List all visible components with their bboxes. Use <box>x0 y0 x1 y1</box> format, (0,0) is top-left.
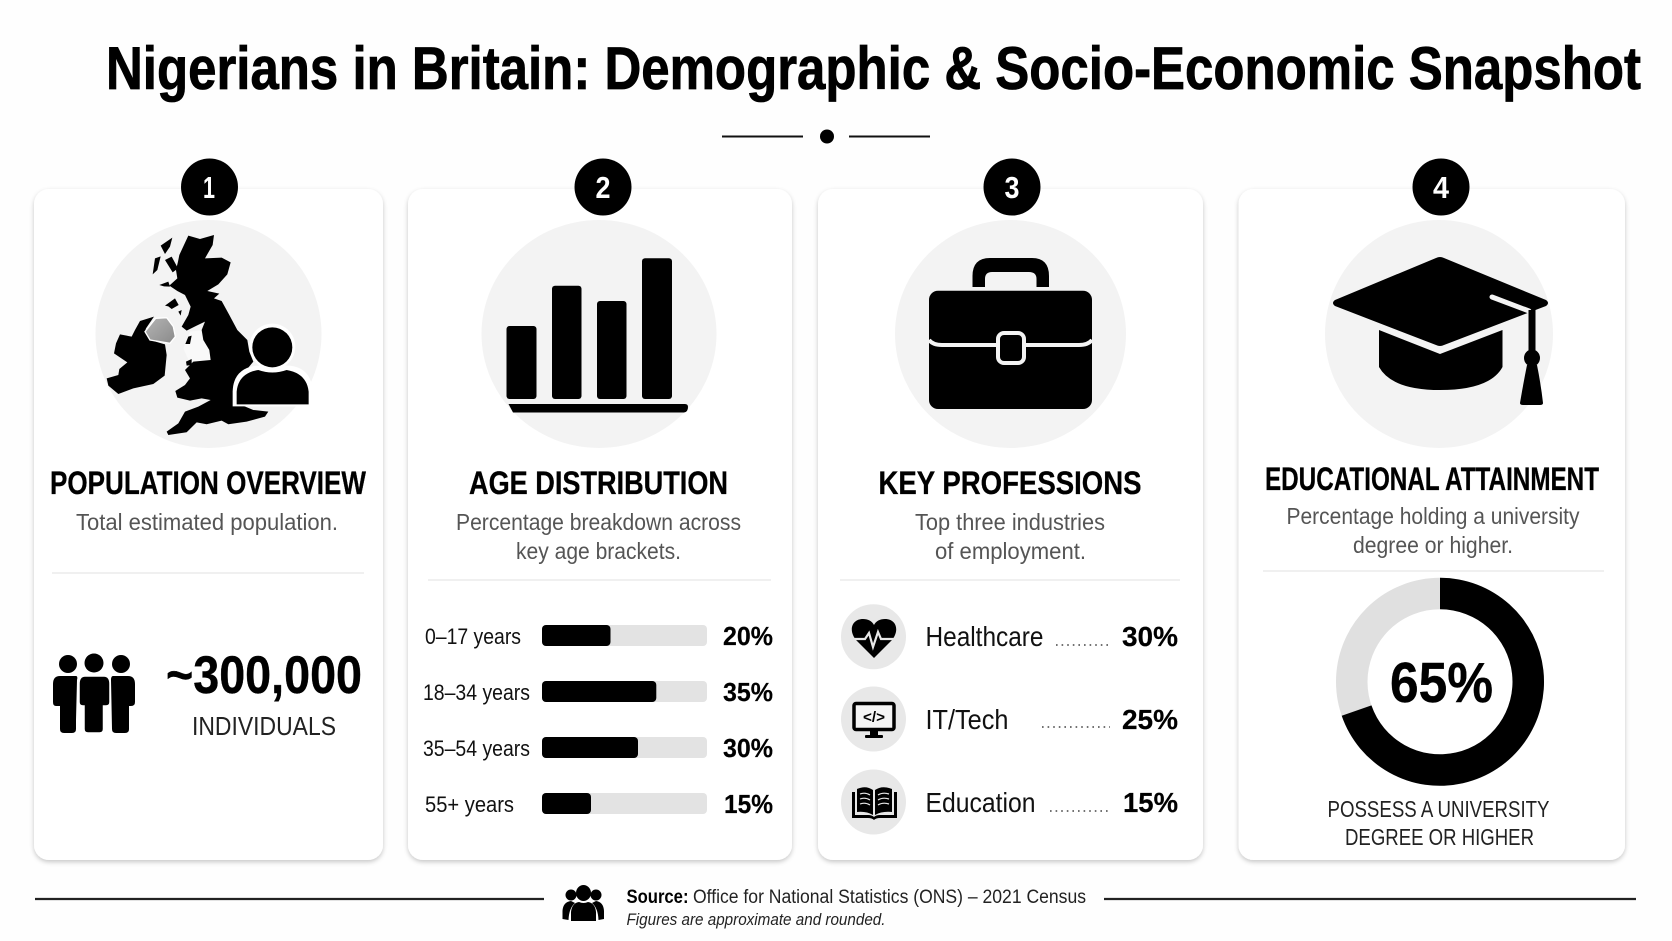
source line: Office for National Statistics (ONS) – 2021 Census <box>693 887 1086 908</box>
caption: DEGREE OR HIGHER <box>1345 824 1534 850</box>
row: IT/Tech 25%: 25% <box>1122 704 1178 735</box>
number badge 4 <box>1412 158 1470 216</box>
icon backdrop circle <box>895 220 1126 448</box>
description: Percentage breakdown across <box>456 509 741 535</box>
bar row: 0-17 years 20%: 0–17 years <box>425 624 521 649</box>
heading: KEY PROFESSIONS <box>878 465 1142 501</box>
number badge 3 <box>984 158 1040 216</box>
description <box>915 509 1105 564</box>
caption <box>1328 796 1550 850</box>
description: Total estimated population. <box>76 509 338 535</box>
row: education 15%: 15% <box>1123 787 1178 818</box>
description: degree or higher. <box>1353 532 1513 558</box>
row: healthcare 30%: 30% <box>1122 621 1178 652</box>
donut chart 65% <box>1342 578 1544 786</box>
bar row: 18-34 years 35%: 18–34 years <box>423 680 530 705</box>
row: education 15%: Education <box>926 787 1036 818</box>
icon: heart with pulse <box>852 619 896 658</box>
row: IT/Tech 25% <box>841 686 1178 752</box>
icon: briefcase <box>929 258 1092 409</box>
number badge 1 <box>181 158 238 216</box>
icon: monitor with code <box>854 704 894 738</box>
icon: monitor with code: </> <box>863 709 885 726</box>
number badge 2 <box>574 158 632 216</box>
heading: AGE DISTRIBUTION <box>469 465 728 501</box>
bar row: 35-54 years 30%: 30% <box>723 733 773 763</box>
source line: Source: <box>626 887 688 908</box>
panel: educational attainment <box>1238 158 1625 860</box>
icon: people group footer <box>562 885 604 921</box>
panel: population overview <box>34 158 383 860</box>
description <box>456 509 741 564</box>
bar row: 55+ years 15%: 15% <box>724 789 773 819</box>
number badge 1: 1 <box>203 170 215 205</box>
icon backdrop circle <box>1325 220 1553 448</box>
bar row: 0-17 years 20%: 20% <box>723 621 773 651</box>
row: education 15% <box>841 770 1178 834</box>
big number: ~300,000 <box>166 646 362 705</box>
icon backdrop circle <box>482 220 716 448</box>
icon: open book <box>852 787 897 820</box>
number badge 3: 3 <box>1004 170 1020 205</box>
bar row: 55+ years 15%: 55+ years <box>425 792 514 817</box>
footnote: Figures are approximate and rounded. <box>626 911 886 929</box>
description: of employment. <box>935 538 1086 564</box>
row: healthcare 30%: Healthcare <box>926 621 1044 652</box>
panel: age distribution <box>408 158 792 860</box>
row: IT/Tech 25%: IT/Tech <box>926 704 1008 735</box>
bar row: 55+ years 15% <box>425 789 773 819</box>
caption: POSSESS A UNIVERSITY <box>1328 796 1550 822</box>
bar row: 35-54 years 30% <box>423 733 773 763</box>
number badge 4: 4 <box>1433 170 1450 205</box>
description <box>1286 503 1580 558</box>
icon: bar chart <box>506 258 688 412</box>
description: Top three industries <box>915 509 1105 535</box>
description: key age brackets. <box>516 538 681 564</box>
bar row: 18-34 years 35%: 35% <box>723 677 773 707</box>
icon backdrop circle <box>96 220 322 448</box>
heading: POPULATION OVERVIEW <box>50 465 366 501</box>
bar row: 35-54 years 30%: 35–54 years <box>423 736 530 761</box>
panel: key professions <box>818 158 1203 860</box>
donut chart 65%: 65% <box>1390 651 1493 715</box>
number badge 2: 2 <box>596 170 610 205</box>
icon: group of people <box>53 654 135 733</box>
icon: UK map with person <box>107 235 313 435</box>
description: Percentage holding a university <box>1286 503 1580 529</box>
caption: INDIVIDUALS <box>192 711 336 741</box>
bar row: 0-17 years 20% <box>425 621 773 651</box>
bar row: 18-34 years 35% <box>423 677 773 707</box>
row: healthcare 30% <box>841 604 1178 669</box>
icon: graduation cap <box>1333 257 1548 405</box>
